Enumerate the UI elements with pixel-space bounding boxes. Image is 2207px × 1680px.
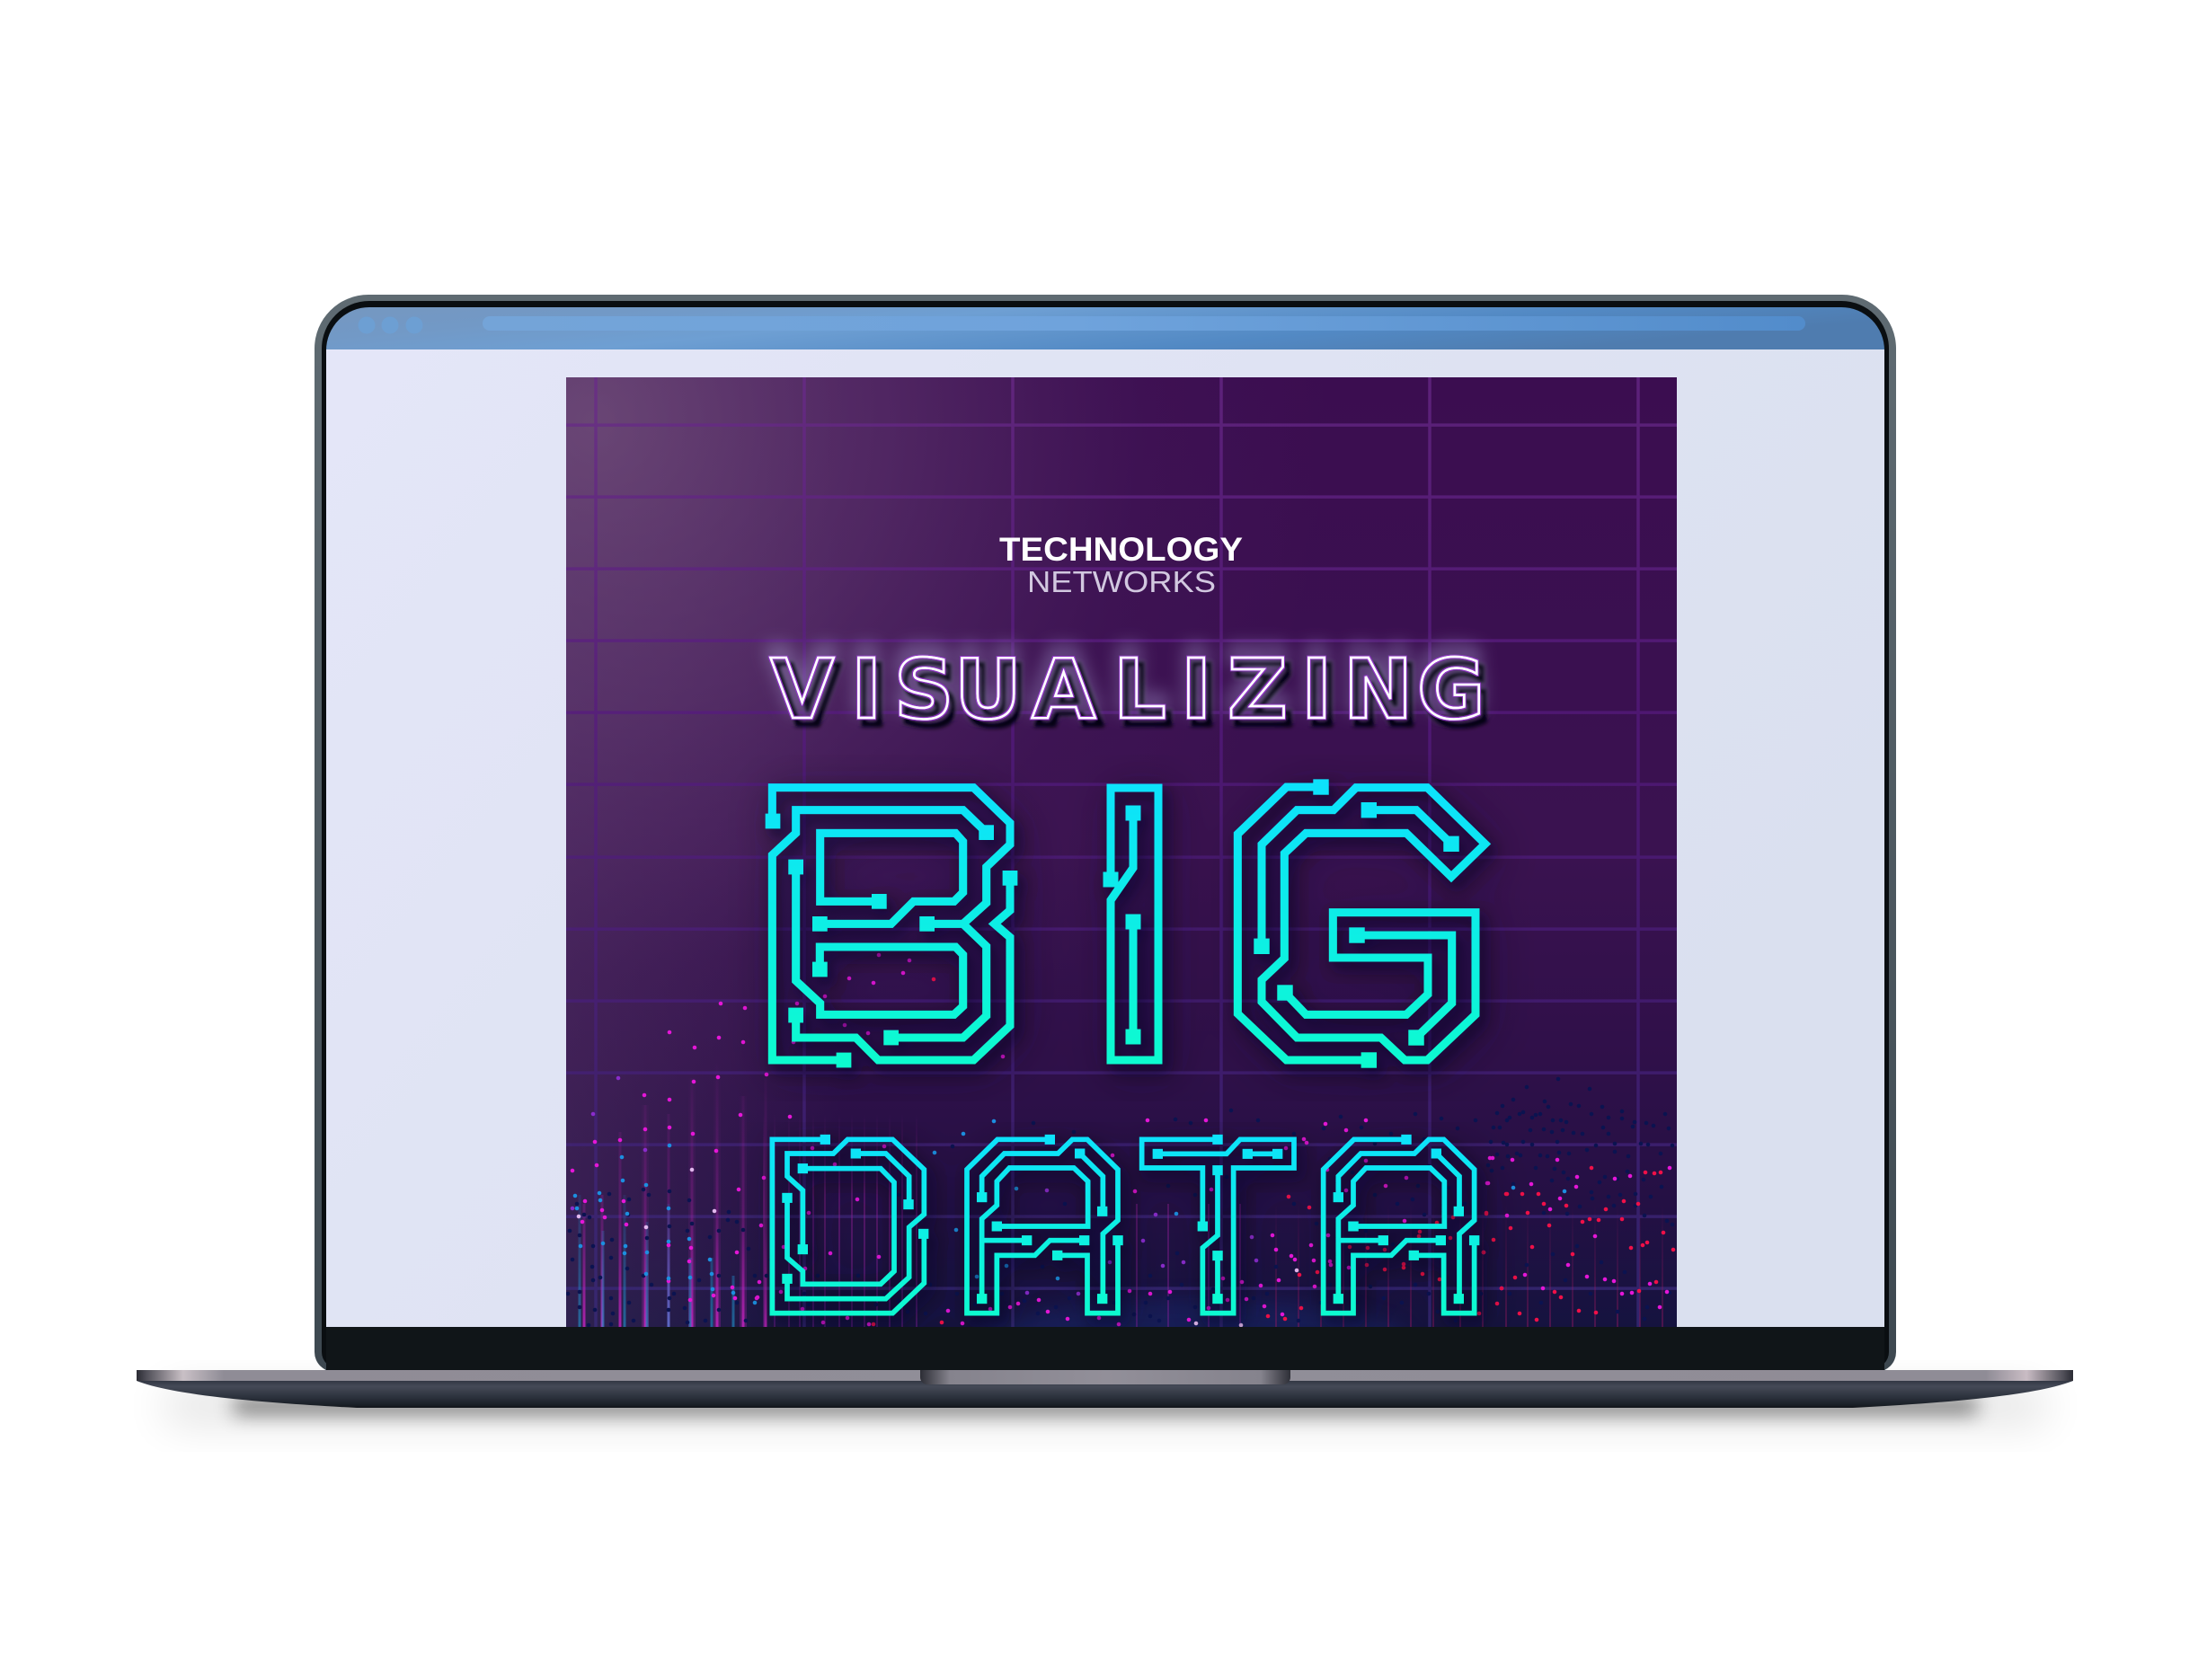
infographic panel: [566, 377, 1677, 1388]
letter A: [967, 1139, 1123, 1313]
laptop base: [137, 1370, 2073, 1408]
base top edge: [137, 1370, 2073, 1381]
window control dots: [358, 316, 422, 334]
logo: Technology Networks: [999, 537, 1242, 593]
scattered data points: [568, 955, 1673, 1325]
shadow under laptop: [166, 1391, 2044, 1421]
letter G: [1237, 787, 1485, 1060]
browser screen background: [326, 349, 1884, 1327]
letter T: [1142, 1139, 1294, 1313]
navy data points: [568, 1079, 1672, 1325]
logo line two: NETWORKS: [1027, 565, 1216, 598]
data streaks rising from the bottom: [580, 1060, 1662, 1327]
heading: VISUALIZING: VISUALIZING: [770, 641, 1485, 738]
heading: BIG in circuit lettering: [766, 787, 1485, 1060]
heading: DATA in circuit lettering: [772, 1139, 1479, 1313]
logo line one: TECHNOLOGY: [999, 530, 1243, 568]
red data points: [873, 979, 1673, 1324]
white data points: [579, 1170, 1297, 1325]
letter A (second): [1324, 1139, 1479, 1313]
browser title bar: [326, 307, 1884, 350]
purple data points: [572, 1078, 1256, 1294]
panel background gradient: [566, 377, 1677, 1388]
laptop lid frame: [315, 295, 1896, 1372]
magenta data points: [572, 955, 1670, 1324]
letter B: [766, 788, 1017, 1060]
letter I: [1104, 788, 1158, 1060]
laptop mockup showing the infographic: [137, 295, 2073, 1436]
base lower curved body: [137, 1381, 2073, 1408]
hinge notch: [920, 1370, 1290, 1384]
blue and cyan data points: [575, 1121, 1564, 1303]
address bar: [483, 316, 1805, 331]
letter D: [772, 1139, 928, 1313]
